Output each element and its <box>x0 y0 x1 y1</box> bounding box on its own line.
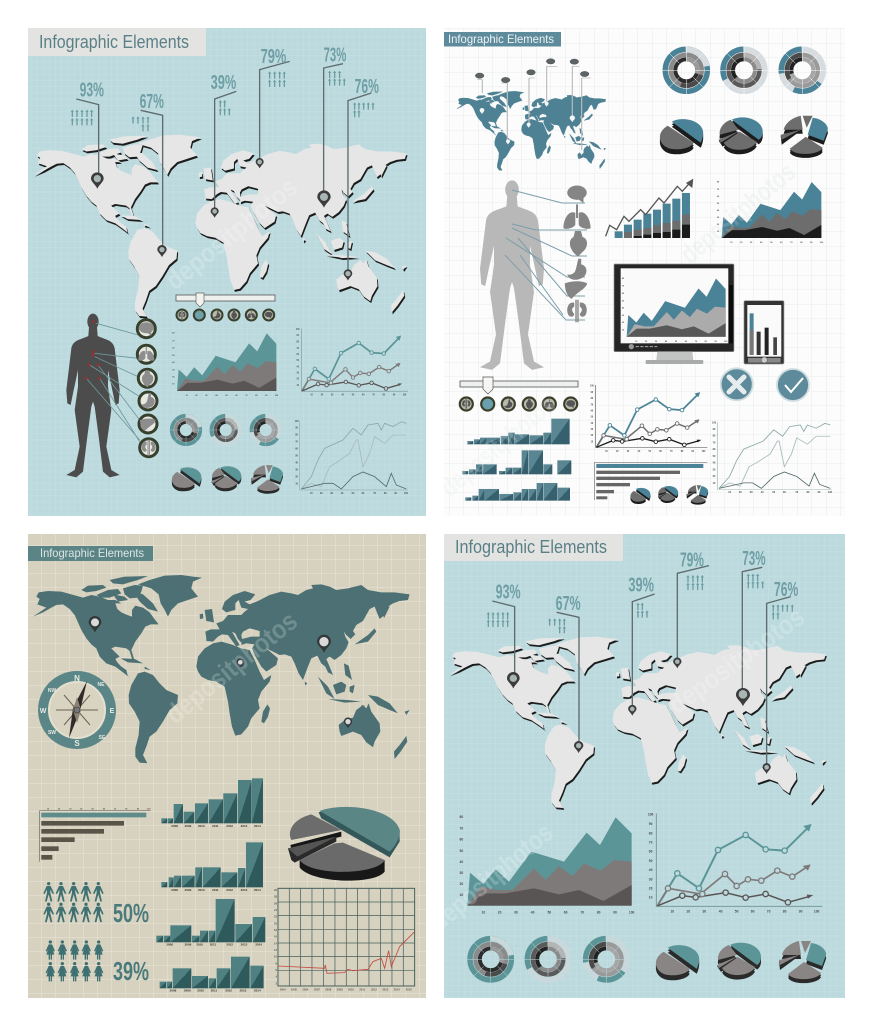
compass: S <box>74 739 80 748</box>
map callouts with percentages: 93% <box>496 580 521 603</box>
compass: E <box>110 708 115 715</box>
map callouts with percentages: 93% <box>80 78 104 101</box>
smooth trend chart <box>712 422 833 494</box>
area chart <box>717 181 824 244</box>
horizontal bars: 90 <box>137 809 140 811</box>
bar groups <box>462 419 571 501</box>
grid chart with red trend line: 2006 <box>302 988 309 992</box>
human figure dark <box>66 314 120 477</box>
watermark <box>435 157 801 503</box>
panel: bottom left, beige <box>28 534 426 998</box>
bar group year labels: 2008 <box>171 824 178 828</box>
grid chart with red trend line: 24 <box>274 908 277 912</box>
map callouts with percentages <box>71 43 379 281</box>
slider <box>460 377 578 394</box>
grid chart with red trend line: 12 <box>274 948 277 952</box>
bar group year labels: 2013 <box>240 988 247 992</box>
bar group year labels: 2008 <box>170 988 177 992</box>
large exploded pie chart <box>288 807 400 881</box>
map callouts with percentages: 67% <box>140 90 164 113</box>
organ glyphs <box>138 322 156 456</box>
grid chart with red trend line: 2013 <box>382 988 389 992</box>
small world map <box>457 91 606 170</box>
compass: NE <box>98 682 105 688</box>
watermark: depositphotos <box>160 172 303 296</box>
world map light <box>34 135 408 319</box>
organ connector lines <box>85 320 140 442</box>
horizontal bars: 30 <box>69 809 72 811</box>
horizontal bars: 50 <box>92 809 95 811</box>
map callouts with percentages <box>487 547 798 774</box>
bar group year labels: 2010 <box>198 888 205 892</box>
map pins with discs <box>475 59 591 155</box>
confirm button <box>777 369 809 401</box>
grid chart with red trend line: 2007 <box>314 988 320 992</box>
grid chart with red trend line: 4 <box>275 975 277 979</box>
compass: W <box>40 708 47 715</box>
watermark: depositphotos <box>435 390 561 503</box>
map callouts with percentages: 67% <box>556 592 581 615</box>
world map light <box>449 637 827 810</box>
grid chart with red trend line: 2008 <box>325 988 332 992</box>
grid chart with red trend line: 10 <box>274 955 277 959</box>
cancel button <box>721 368 753 400</box>
organ connector lines <box>505 190 587 320</box>
bar group year labels: 2008 <box>166 943 173 947</box>
grid chart with red trend line: 26 <box>274 901 277 905</box>
horizontal bars <box>40 808 151 862</box>
grid chart with red trend line: 2004 <box>280 988 286 992</box>
watermark: depositphotos <box>675 157 801 270</box>
grid chart with red trend line: 2014 <box>394 988 400 992</box>
line chart <box>648 813 822 914</box>
donut charts <box>662 46 826 94</box>
panel: top right, white <box>435 28 845 516</box>
watermarks <box>425 602 810 937</box>
people icons: women <box>46 940 103 981</box>
grid chart with red trend line: 6 <box>275 968 277 972</box>
horizontal bars: 100 <box>147 809 151 811</box>
organ icons <box>563 186 591 322</box>
bar group year labels: 2009 <box>185 888 192 892</box>
grid chart with red trend line: 18 <box>274 928 277 932</box>
bar group year labels: 2013 <box>241 824 248 828</box>
panel: bottom right, blue <box>425 534 845 998</box>
bar group year labels: 2009 <box>185 943 192 947</box>
bar groups <box>156 778 265 988</box>
compass <box>38 671 116 749</box>
grid chart with red trend line: 2011 <box>359 988 366 992</box>
bar group year labels: 2013 <box>241 888 248 892</box>
map pins <box>89 616 352 728</box>
world map teal <box>33 575 410 763</box>
percentage 50: 50% <box>113 898 149 928</box>
tablet <box>744 301 784 364</box>
bar group year labels: 2010 <box>198 824 205 828</box>
bar group year labels: 2008 <box>171 888 178 892</box>
bar group year labels: 2009 <box>185 824 192 828</box>
horizontal bars: 10 <box>47 809 50 811</box>
grid chart with red trend line: 16 <box>274 935 277 939</box>
bar group year labels <box>166 824 262 992</box>
grid chart with red trend line: 2009 <box>337 988 343 992</box>
bar group year labels: 2012 <box>226 824 233 828</box>
grid chart with red trend line: 30 <box>274 888 277 892</box>
bar group year labels: 2010 <box>197 988 204 992</box>
bar group year labels: 2014 <box>254 988 261 992</box>
grid chart with red trend line: 22 <box>274 915 277 919</box>
horizontal bars: 80 <box>125 809 128 811</box>
compass: SE <box>99 735 106 741</box>
title bar: Infographic Elements <box>455 537 607 557</box>
bar group year labels: 2009 <box>184 988 191 992</box>
watermark: depositphotos <box>160 606 303 730</box>
bar group year labels: 2010 <box>196 943 203 947</box>
small pie charts <box>630 485 708 505</box>
map callouts with percentages: 73% <box>324 43 346 66</box>
bar group year labels: 2013 <box>241 943 248 947</box>
slider organ buttons <box>460 398 577 410</box>
bar group year labels: 2011 <box>212 888 219 892</box>
title bar: Infographic Elements <box>39 32 189 52</box>
donut charts <box>467 936 630 983</box>
slider <box>176 293 275 307</box>
grid chart with red trend line: 2012 <box>371 988 377 992</box>
title bar <box>444 534 623 561</box>
bar group year labels: 2011 <box>211 988 218 992</box>
title bar: Infographic Elements <box>40 546 144 560</box>
human figure grey <box>480 180 544 370</box>
map callouts with percentages: 76% <box>355 75 379 98</box>
horizontal bars: 70 <box>114 809 117 811</box>
people icons: men <box>43 882 104 922</box>
donut charts <box>170 414 282 446</box>
horizontal bars: 40 <box>80 808 83 811</box>
panel: top left, blue <box>28 28 426 516</box>
bar group year labels: 2012 <box>225 988 232 992</box>
line chart <box>296 328 408 397</box>
horizontal bars <box>595 462 707 500</box>
grid chart with red trend line: 2010 <box>348 988 354 992</box>
area chart <box>172 333 279 397</box>
title bar: Infographic Elements <box>448 32 554 46</box>
slider organ buttons <box>176 310 274 320</box>
grid chart with red trend line: 2015 <box>406 988 412 992</box>
pie charts <box>656 941 826 983</box>
bar group year labels: 2014 <box>254 824 261 828</box>
grid chart with red trend line: 14 <box>274 941 277 945</box>
bar group year labels: 2012 <box>226 888 233 892</box>
bar group year labels: 2014 <box>254 888 261 892</box>
horizontal bars: 20 <box>58 809 61 811</box>
percentage 39: 39% <box>113 956 149 986</box>
map callouts with percentages: 79% <box>680 549 704 572</box>
bar group year labels: 2011 <box>210 943 217 947</box>
line chart <box>590 385 707 453</box>
map callouts with percentages: 39% <box>211 71 236 94</box>
monitor <box>614 264 734 364</box>
map callouts with percentages: 73% <box>742 547 766 570</box>
pie charts <box>172 465 283 494</box>
grid chart with red trend line: 8 <box>275 961 277 965</box>
grid chart with red trend line: 20 <box>274 921 277 925</box>
grid chart with red trend line <box>274 888 415 992</box>
map callouts with percentages: 39% <box>628 574 654 597</box>
bar group year labels: 2011 <box>212 824 219 828</box>
compass: N <box>74 674 80 683</box>
smooth trend chart <box>295 421 409 495</box>
bar group year labels: 2012 <box>226 943 233 947</box>
compass: SW <box>48 730 56 736</box>
organ icons column <box>137 320 158 457</box>
horizontal bars: 60 <box>103 809 106 811</box>
monitor area chart <box>622 278 728 343</box>
map callouts with percentages: 79% <box>261 45 286 68</box>
grid chart with red trend line: 2 <box>275 981 277 985</box>
bar group year labels: 2014 <box>255 943 262 947</box>
grid chart with red trend line: 2005 <box>291 988 297 992</box>
grid chart with red trend line: 28 <box>274 895 277 899</box>
title bar <box>28 28 206 56</box>
map callouts with percentages: 76% <box>774 578 798 601</box>
watermarks: depositphotos <box>425 817 559 937</box>
rising bar chart with arrow <box>606 179 693 238</box>
compass: NW <box>48 688 56 694</box>
watermarks: depositphotos <box>663 602 810 720</box>
area chart <box>459 815 635 914</box>
pie charts <box>660 116 828 158</box>
